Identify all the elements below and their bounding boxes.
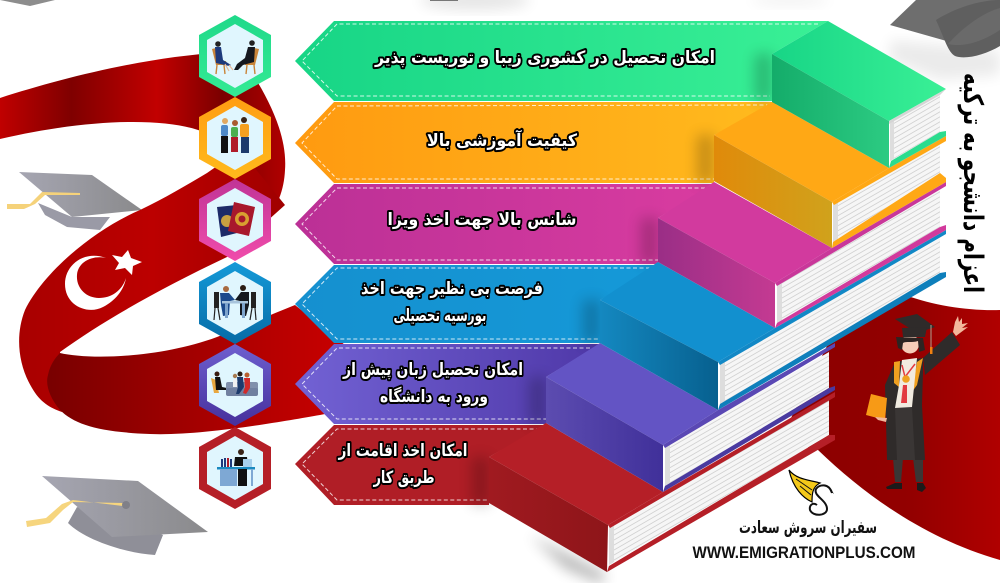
- icon: person at desk: [217, 449, 255, 486]
- ribbon lower band: [47, 305, 345, 434]
- hexagon 3: passports: [199, 179, 271, 261]
- graduation cap: left: [7, 172, 142, 230]
- hand: [953, 316, 968, 336]
- illustration: graduate: [866, 314, 968, 492]
- text: banner 3: شانس بالا جهت اخذ ویزا: [388, 210, 576, 230]
- book stack: [489, 21, 946, 572]
- banner 4: [295, 265, 660, 343]
- face: [901, 334, 919, 354]
- background ribbon: Turkish flag: [0, 50, 345, 434]
- icon: three students: [221, 117, 249, 153]
- lanyard and tie: [902, 364, 915, 377]
- stole: [894, 361, 900, 387]
- text: banner 5: [342, 360, 523, 407]
- text: banner 6: طریق کار: [373, 468, 434, 488]
- folder: [866, 394, 887, 420]
- hexagon 1: interview: [199, 15, 271, 97]
- book: blue: [600, 230, 946, 410]
- banner 6: [295, 425, 546, 505]
- cap: [895, 314, 935, 333]
- raised arm: [923, 332, 960, 375]
- book shadows on banners: [472, 54, 772, 505]
- text: banner 4: فرصت بی نظیر جهت اخذ: [361, 279, 543, 299]
- tassel: [930, 325, 932, 347]
- hexagon 2: students: [199, 97, 271, 179]
- graduation cap: top right: [890, 0, 1000, 80]
- book: orange: [714, 102, 946, 248]
- icon: two people at table: [214, 285, 256, 320]
- hexagon 4: meeting: [199, 262, 271, 344]
- icon: two people seated: [212, 40, 259, 74]
- ribbon top band: [0, 50, 285, 244]
- text: banner 6: [338, 441, 468, 488]
- legs: [893, 458, 903, 482]
- logo text: سفیران سروش سعادت: [739, 518, 877, 538]
- text: banner 4: [361, 279, 543, 326]
- book: green: [772, 21, 946, 168]
- text: banner 4: بورسیه تحصیلی: [394, 306, 486, 326]
- star: [112, 250, 142, 275]
- hair: [896, 337, 925, 352]
- graduation cap: bottom left: [26, 476, 208, 555]
- banner 2: [295, 102, 780, 183]
- crescent: [65, 256, 126, 310]
- shirt: [895, 358, 917, 408]
- icon: family on sofa: [211, 372, 258, 396]
- banner 1: [295, 21, 828, 101]
- shoes: [886, 483, 902, 489]
- icon: passports: [217, 202, 255, 237]
- ribbon middle band: [19, 150, 285, 412]
- hexagon 5: family consultation: [199, 344, 271, 426]
- text: banner 6: امکان اخذ اقامت از: [338, 441, 468, 461]
- gown: [885, 358, 925, 460]
- text: banner 1: امکان تحصیل در کشوری زیبا و توریست پذیر: [374, 48, 715, 68]
- banner 5: [295, 344, 600, 424]
- title: vertical: اعزام دانشجو به ترکیه: [957, 73, 988, 293]
- background swoosh: right: [780, 295, 1000, 560]
- hexagon 6: office worker: [199, 427, 271, 509]
- book: magenta: [658, 182, 946, 328]
- trousers: [895, 407, 915, 460]
- book: red: [489, 392, 835, 572]
- logo: winged swan: [789, 470, 834, 515]
- text: banner 2: کیفیت آموزشی بالا: [427, 129, 577, 151]
- text: banner 5: ورود به دانشگاه: [380, 386, 488, 407]
- website url: WWW.EMIGRATIONPLUS.COM: [692, 543, 916, 562]
- book: purple: [546, 343, 835, 492]
- banner 3: [295, 184, 714, 264]
- text: banner 5: امکان تحصیل زبان پیش از: [342, 360, 523, 380]
- top decorative graduation cap shadows: [0, 0, 830, 10]
- shadow under bottom book: [530, 535, 607, 583]
